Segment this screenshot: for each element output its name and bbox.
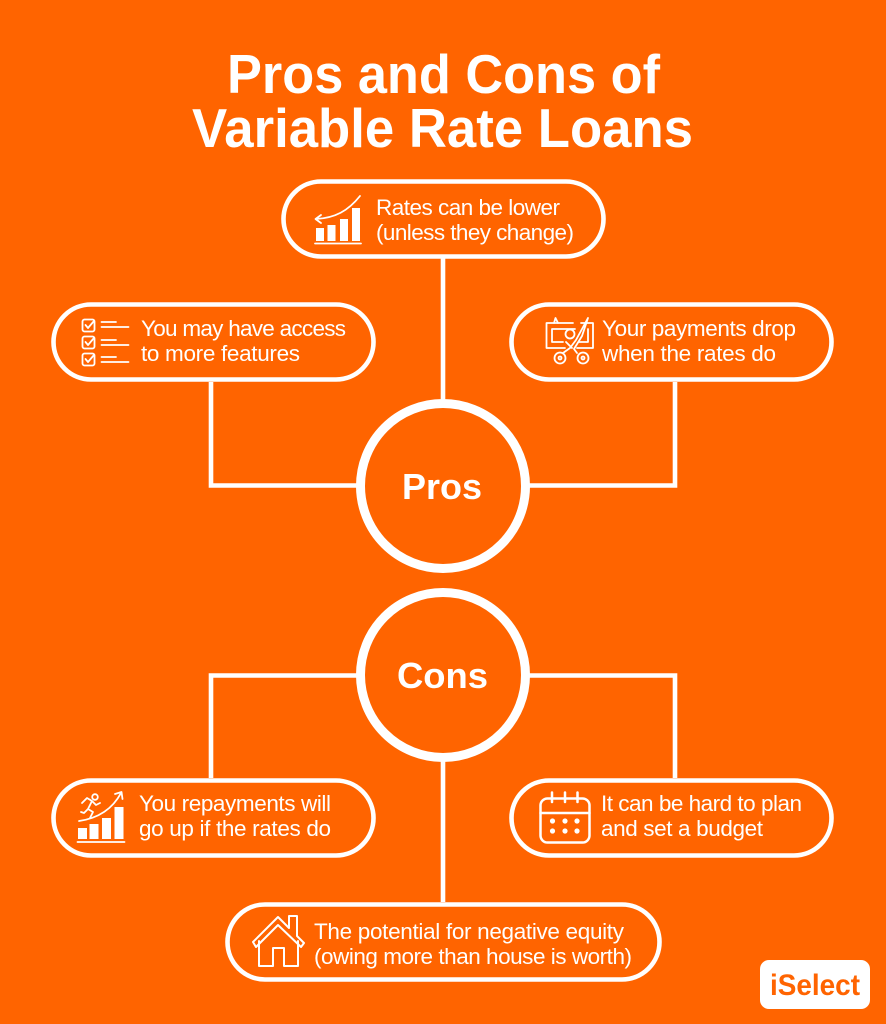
text: more features [141,316,346,366]
text: repayments go up [139,791,331,841]
text: payments drop: Your payments drop [602,316,796,341]
text: hard to budget [601,791,802,841]
circle: pros [360,404,526,568]
text: payments drop [601,316,796,366]
icon: runner on rising bars [78,792,124,842]
title: Variable Rate Loans [192,97,693,159]
text: repayments go up: You repayments will [139,791,331,816]
panel: repayments go up [54,780,374,856]
panel: more features [54,304,374,380]
text: negative equity: (owing more than house is worth) [314,944,632,969]
title: Pros and Cons of [227,43,661,105]
connectors: cons [211,676,675,902]
text: rates can be lower: (unless they change) [376,220,574,245]
text: payments drop: when the rates do [601,341,776,366]
panel: rates can be lower [284,182,604,256]
text: repayments go up: go up if the rates do [139,816,331,841]
panel: payments drop [512,304,832,380]
icon: checklist [82,320,128,366]
icon: calendar [540,792,590,842]
text: more features: to more features [141,341,300,366]
panel: negative equity [228,904,660,980]
circle: cons [360,592,526,758]
logo: iSelect [760,960,870,1009]
text: hard to budget: and set a budget [601,816,764,841]
text: rates can be lower: Rates can be lower [376,195,560,220]
title [192,43,693,159]
icon: falling rate bar chart [315,196,361,244]
text: negative equity: The potential for negative equity [314,919,625,944]
icon: house [253,916,304,966]
text: hard to budget: It can be hard to plan [601,791,802,816]
circle: pros: Pros [402,466,482,507]
text: more features: You may have access [141,316,346,341]
connectors: pros [211,258,675,486]
icon: scissors cutting a banknote [546,318,593,364]
circle: cons: Cons [397,655,488,696]
logo: iSelect: iSelect [770,969,860,1002]
text: negative equity [314,919,632,969]
text: rates can be lower [376,195,574,245]
panel: hard to budget [512,780,832,856]
